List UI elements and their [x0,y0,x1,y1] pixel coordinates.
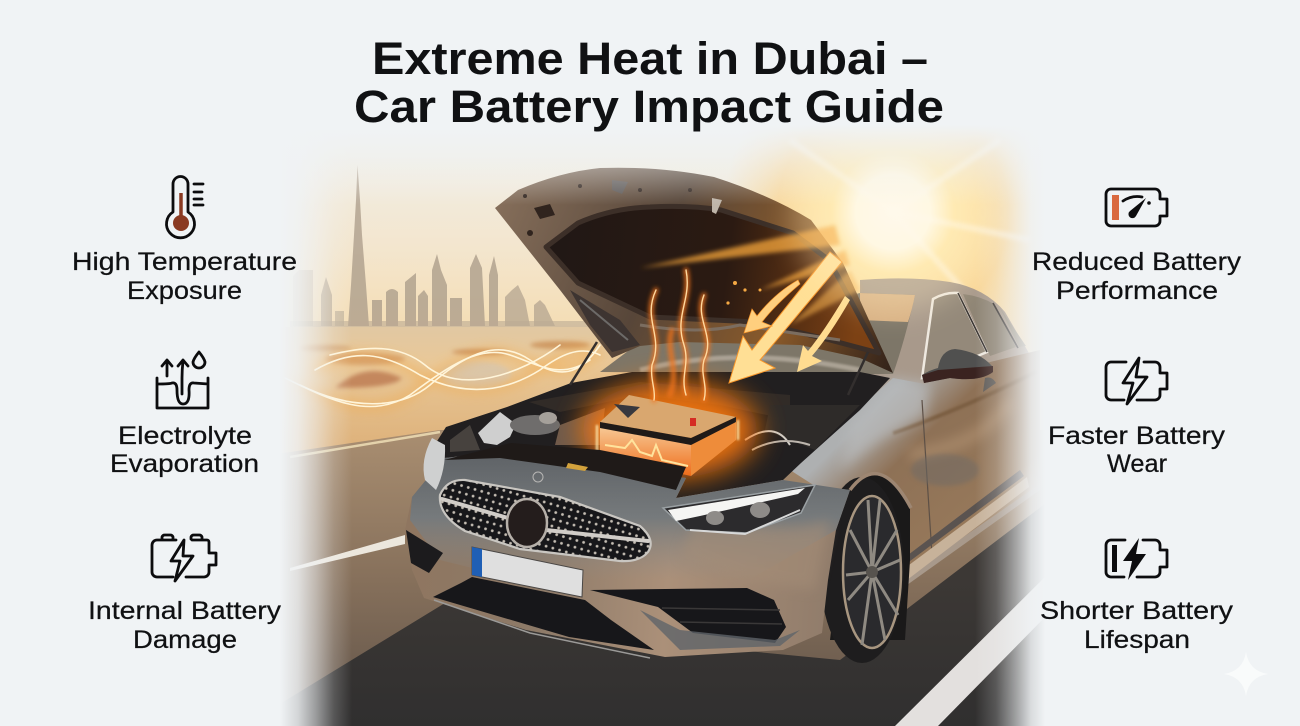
left headlight [424,438,445,490]
item: Reduced Battery Performance [1032,189,1242,305]
arrow: heat down to battery, upper [744,280,800,333]
soft edge fades [230,0,1100,726]
item: Faster Battery Wear [1048,358,1226,478]
label: Evaporation [110,450,259,478]
front lip [444,443,686,490]
left air intake [406,530,443,573]
car: front body [405,438,911,658]
icon: damaged battery [152,535,216,581]
label: Shorter Battery [1040,597,1234,625]
label: Wear [1107,450,1167,478]
hood detail marks [523,180,722,236]
icon: sun [723,42,1063,382]
Dubai skyline [290,165,610,328]
sun glare over hood [793,112,993,312]
grille [440,480,651,561]
label: Performance [1056,277,1218,305]
title [354,33,944,132]
label [88,597,282,654]
label: Electrolyte [118,422,252,450]
icon: thermometer [167,177,203,238]
icon: evaporating liquid [157,352,208,408]
arrow: heat down to battery, right [797,296,850,372]
sparks [726,281,762,305]
desert sand [270,327,640,457]
side windows [922,293,1026,378]
car: rear cabin [600,278,1040,590]
windshield [600,293,915,374]
arrow: heat down to battery, large [729,252,842,383]
icon: low battery with bolt [1106,538,1167,580]
hood struts [570,342,868,395]
car: front wheel [820,475,910,663]
item: High Temperature Exposure [72,177,297,305]
side mirror [922,349,993,383]
label: High Temperature [72,248,297,276]
car battery [597,395,738,476]
label: Damage [133,626,237,654]
item: Electrolyte Evaporation [110,352,259,478]
right headlight [663,485,815,534]
rim spokes [846,500,900,645]
label [1032,248,1242,305]
car: open hood [495,168,893,395]
heat flames rising from battery [651,270,708,400]
label: Internal Battery [88,597,282,625]
sun rays on hood [640,225,860,325]
icon: battery with lightning bolt [1106,358,1167,404]
item: Shorter Battery Lifespan [1040,538,1234,654]
right air intake [590,588,786,643]
number plate [472,547,583,597]
icon: battery with gauge [1106,189,1167,226]
engine parts [450,408,810,452]
road [270,430,1050,726]
heat waves [285,345,600,407]
label [72,248,297,305]
roof and pillars [860,278,1040,590]
scene illustration: car in Dubai heat [270,42,1063,726]
label: Faster Battery [1048,422,1226,450]
car: engine bay [427,372,890,500]
label [1048,422,1226,478]
side panel and fender [790,350,1040,576]
label [1040,597,1234,654]
title: Extreme Heat in Dubai – [372,33,928,84]
sky [270,130,1050,450]
badge circle [507,499,547,547]
label: Lifespan [1084,626,1190,654]
label: Exposure [127,277,242,305]
lower air intake [433,577,654,650]
icon: sparkle watermark [1224,652,1268,696]
title: Car Battery Impact Guide [354,81,944,132]
label [110,422,259,478]
battery glow [582,382,758,478]
item: Internal Battery Damage [88,535,282,654]
label: Reduced Battery [1032,248,1242,276]
